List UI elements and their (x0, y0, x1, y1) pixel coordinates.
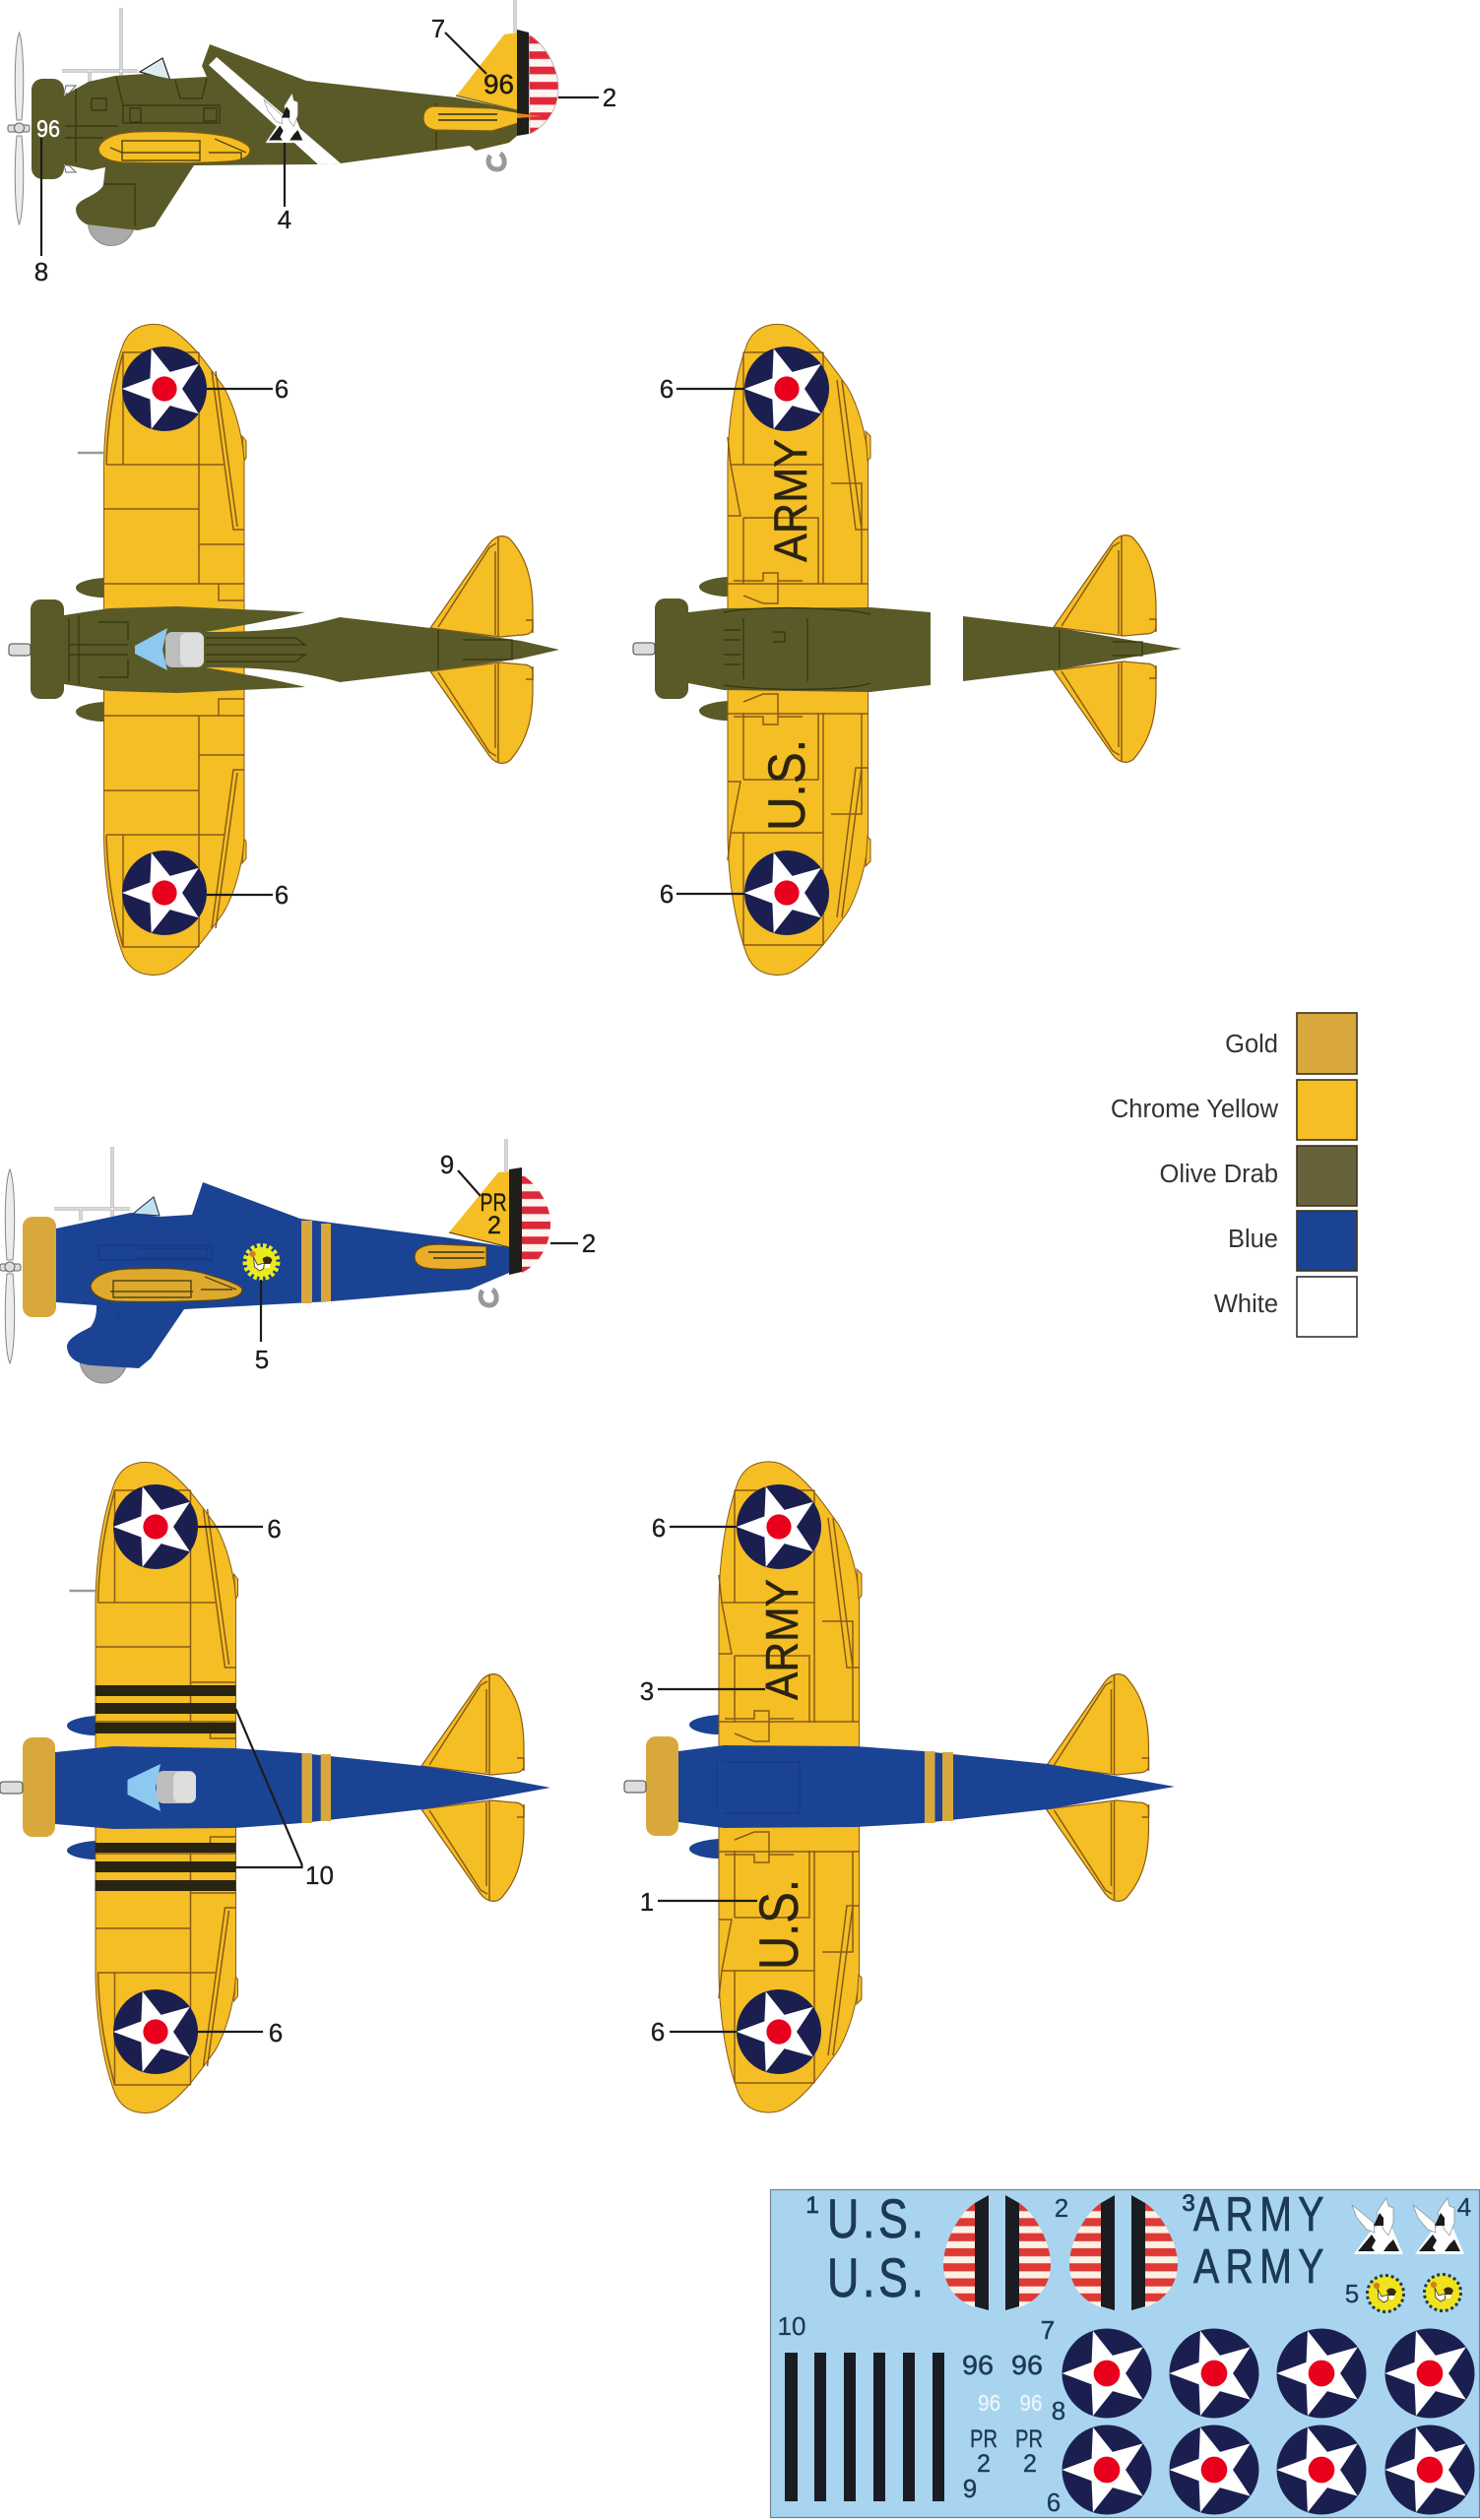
aircraft 1: underside view (633, 325, 1182, 975)
callout 5 (255, 1280, 269, 1374)
sun badge (246, 1246, 278, 1278)
tailplane (421, 1674, 524, 1901)
decal 3: ARMY lettering: ARMY (1193, 2188, 1330, 2241)
fuselage shading (717, 1762, 800, 1813)
main wheel (80, 1336, 127, 1383)
callout 2 (558, 83, 616, 112)
fuselage aft (963, 616, 1182, 681)
fin root line (456, 95, 517, 110)
decal 8: white cowl numbers: 96 (978, 2390, 1000, 2416)
decal 6: roundels: 6 (1047, 2488, 1061, 2517)
callout 8: 8 (34, 257, 48, 286)
sheet background (770, 2189, 1479, 2518)
callout 6 lower (660, 879, 744, 909)
windshield (135, 628, 167, 670)
main wheel (89, 199, 134, 246)
windshield (128, 1764, 161, 1811)
decal 8: white cowl numbers (978, 2390, 1065, 2426)
decal 8: white cowl numbers: 96 (1020, 2390, 1042, 2416)
fuselage forward (688, 607, 931, 692)
mast and aerial (54, 1139, 506, 1221)
windshield (140, 58, 170, 81)
callout 6 lower: 6 (275, 880, 289, 910)
swatch: gold (1225, 1013, 1357, 1074)
gun fairings (67, 1716, 95, 1859)
decal sheet (770, 2187, 1479, 2518)
fin root line (449, 1232, 509, 1247)
exhaust tip (517, 113, 542, 118)
decal 2: rudder stripes pair one (943, 2195, 1051, 2310)
decal 10: black stripes: 10 (778, 2311, 805, 2341)
decal 3: ARMY lettering: ARMY (1193, 2240, 1330, 2294)
callout 6 upper (198, 1514, 282, 1544)
callout 3: 3 (640, 1676, 654, 1706)
callout 3 (640, 1676, 765, 1706)
fuselage (64, 606, 559, 693)
swatch: olive drab (1160, 1146, 1357, 1206)
PR marking: PR (481, 1189, 506, 1217)
callout 7: 7 (431, 14, 445, 43)
callout 6 lower (651, 2017, 737, 2047)
wing panel lines (78, 352, 246, 947)
callout 4: 4 (278, 205, 291, 234)
callout 4 (278, 143, 291, 234)
tail plane (423, 106, 542, 131)
rudder stripes (529, 34, 558, 134)
wing (104, 325, 244, 975)
decal 5: sun badges: 5 (1345, 2279, 1359, 2308)
cowling gold (646, 1736, 678, 1836)
icon: propeller (0, 1169, 21, 1363)
decal 1: US lettering: U.S. (827, 2246, 928, 2308)
gun fairings (76, 578, 103, 722)
rudder post black band (509, 1167, 522, 1275)
black lower wing bands (95, 1843, 236, 1891)
decal 5: sun badges (1345, 2274, 1461, 2311)
callout 6 lower (207, 880, 289, 910)
roundel upper (744, 346, 829, 431)
wing panel lines (728, 352, 870, 945)
eagle insignia (264, 94, 306, 143)
cowling (31, 599, 64, 699)
fin (449, 1171, 509, 1247)
callout 6 lower (198, 2018, 283, 2048)
callout 10: 10 (305, 1860, 334, 1890)
callout 5: 5 (255, 1345, 269, 1374)
tail plane details (438, 114, 497, 120)
spinner (9, 644, 31, 656)
gun fairings (689, 1715, 719, 1858)
decal 7: fin numbers (962, 2315, 1055, 2380)
callout 6 upper (207, 374, 289, 404)
decal 9: PR 2 markings: 2 (1023, 2450, 1037, 2478)
ARMY lettering: ARMY (764, 439, 816, 562)
swatch: gold: Gold (1225, 1031, 1278, 1058)
white diagonal stripe (209, 57, 341, 164)
callout 7 (431, 14, 486, 74)
callout 6 lower: 6 (651, 2017, 665, 2047)
callout 2 (550, 1228, 596, 1258)
tail plane (415, 1244, 486, 1270)
roundel upper (113, 1484, 198, 1569)
aircraft 1: olive drab side view (8, 0, 616, 286)
spinner (633, 643, 655, 655)
roundel lower (113, 1989, 198, 2074)
cowling (655, 598, 688, 699)
decal 10: black stripes (778, 2311, 944, 2501)
canopy (157, 1771, 196, 1803)
aircraft 2: underside view (624, 1462, 1175, 2112)
decal 9: PR 2 markings: PR (970, 2426, 997, 2453)
fuselage (55, 1746, 550, 1829)
wing (719, 1462, 859, 2112)
callout 9: 9 (440, 1150, 454, 1179)
aircraft 2: top view (0, 1463, 550, 2112)
wing root fairing (98, 132, 250, 163)
decal 3: ARMY lettering: 3 (1182, 2190, 1195, 2217)
canopy (165, 632, 204, 667)
ARMY lettering: ARMY (756, 1579, 807, 1700)
tail plane details (428, 1252, 484, 1258)
decal 8: white cowl numbers: 8 (1052, 2396, 1065, 2426)
callout 10 (236, 1709, 334, 1890)
spinner (624, 1781, 646, 1793)
tail wheel (488, 154, 504, 169)
roundel lower (737, 1989, 821, 2074)
decal 9: PR 2 markings: PR (1015, 2426, 1043, 2453)
callout 6 upper: 6 (267, 1514, 282, 1544)
callout 2: 2 (603, 83, 616, 112)
callout 1: 1 (640, 1887, 654, 1917)
tailplane (430, 536, 533, 763)
swatch: white (1214, 1277, 1357, 1337)
spinner (0, 1782, 23, 1794)
decal 9: PR 2 markings (963, 2426, 1043, 2503)
decal 2: rudder stripes pair two: 2 (1055, 2193, 1068, 2223)
roundel lower (744, 850, 829, 935)
swatch: olive drab: Olive Drab (1160, 1161, 1278, 1188)
decal 1: US lettering: 1 (805, 2192, 819, 2219)
decal 3: ARMY lettering (1182, 2188, 1330, 2294)
fuselage olive (64, 44, 517, 230)
callout 6 upper (660, 374, 744, 404)
wing (96, 1463, 236, 2112)
wing root details (110, 139, 246, 160)
roundel lower (122, 850, 207, 935)
mast and aerial (62, 0, 515, 85)
cowling gold (23, 1217, 56, 1317)
callout 6 lower: 6 (269, 2018, 283, 2048)
roundel upper (737, 1484, 821, 1569)
aircraft 1: top view (9, 325, 559, 975)
swatch: chrome yellow: Chrome Yellow (1111, 1096, 1279, 1123)
callout 6 lower: 6 (660, 879, 674, 909)
cowling (32, 79, 64, 179)
swatch: white: White (1214, 1291, 1278, 1318)
callout 2: 2 (582, 1228, 596, 1258)
callout 1 (640, 1887, 757, 1917)
decal 6: roundels (1047, 2329, 1474, 2517)
swatch: blue: Blue (1228, 1226, 1278, 1253)
fuselage detail (724, 608, 1142, 689)
gold fuselage bands (301, 1753, 331, 1823)
US lettering: U.S. (747, 1879, 809, 1970)
decal 4: eagle insignia: 4 (1457, 2192, 1471, 2222)
wing panel lines (69, 1490, 238, 2085)
gold fuselage bands (301, 1221, 331, 1303)
decal 1: US lettering: U.S. (827, 2187, 928, 2249)
wing panel lines (719, 1490, 862, 2083)
rudder stripes (522, 1174, 550, 1273)
aircraft 2: blue side view (0, 1139, 596, 1383)
cowling gold (23, 1737, 55, 1837)
tailplane (1054, 536, 1156, 762)
decal 2: rudder stripes pair two (1055, 2193, 1178, 2310)
fuselage shading (98, 1245, 212, 1319)
fuselage detail (69, 615, 512, 684)
tail wheel (481, 1290, 496, 1305)
fuselage (678, 1745, 1175, 1828)
gun fairings (699, 577, 728, 721)
number 2 on fin: 2 (487, 1212, 501, 1239)
fuselage panel lines (65, 77, 436, 226)
black upper wing bands (95, 1685, 236, 1733)
callout 6 upper: 6 (275, 374, 289, 404)
wing (728, 325, 869, 975)
gold fuselage bands (925, 1751, 953, 1823)
decal 1: US lettering (805, 2187, 928, 2308)
fin (456, 32, 517, 110)
decal 9: PR 2 markings: 2 (977, 2450, 991, 2478)
number on cowl: 96 (36, 116, 60, 143)
wing root fairing (91, 1268, 242, 1301)
wing root details (110, 1277, 236, 1297)
fuselage blue (56, 1182, 509, 1368)
icon: propeller (8, 32, 30, 224)
swatch: blue (1228, 1211, 1357, 1271)
callout 6 upper (652, 1513, 737, 1543)
decal 7: fin numbers: 96 (962, 2350, 994, 2380)
tailplane (1046, 1674, 1148, 1901)
callout 6 upper: 6 (660, 374, 674, 404)
callout 6 upper: 6 (652, 1513, 666, 1543)
number on fin: 96 (483, 69, 514, 99)
decal 4: eagle insignia (1352, 2192, 1471, 2254)
decal 7: fin numbers: 96 (1011, 2350, 1043, 2380)
colour legend (1111, 1013, 1357, 1337)
engine tags (64, 86, 76, 172)
decal 7: fin numbers: 7 (1041, 2315, 1055, 2345)
swatch: chrome yellow (1111, 1080, 1357, 1140)
decal 9: PR 2 markings: 9 (963, 2474, 977, 2503)
callout 9 (440, 1150, 481, 1196)
windshield (133, 1197, 160, 1216)
rudder post black band (517, 30, 529, 136)
roundel upper (122, 346, 207, 431)
US lettering: U.S. (758, 739, 816, 831)
